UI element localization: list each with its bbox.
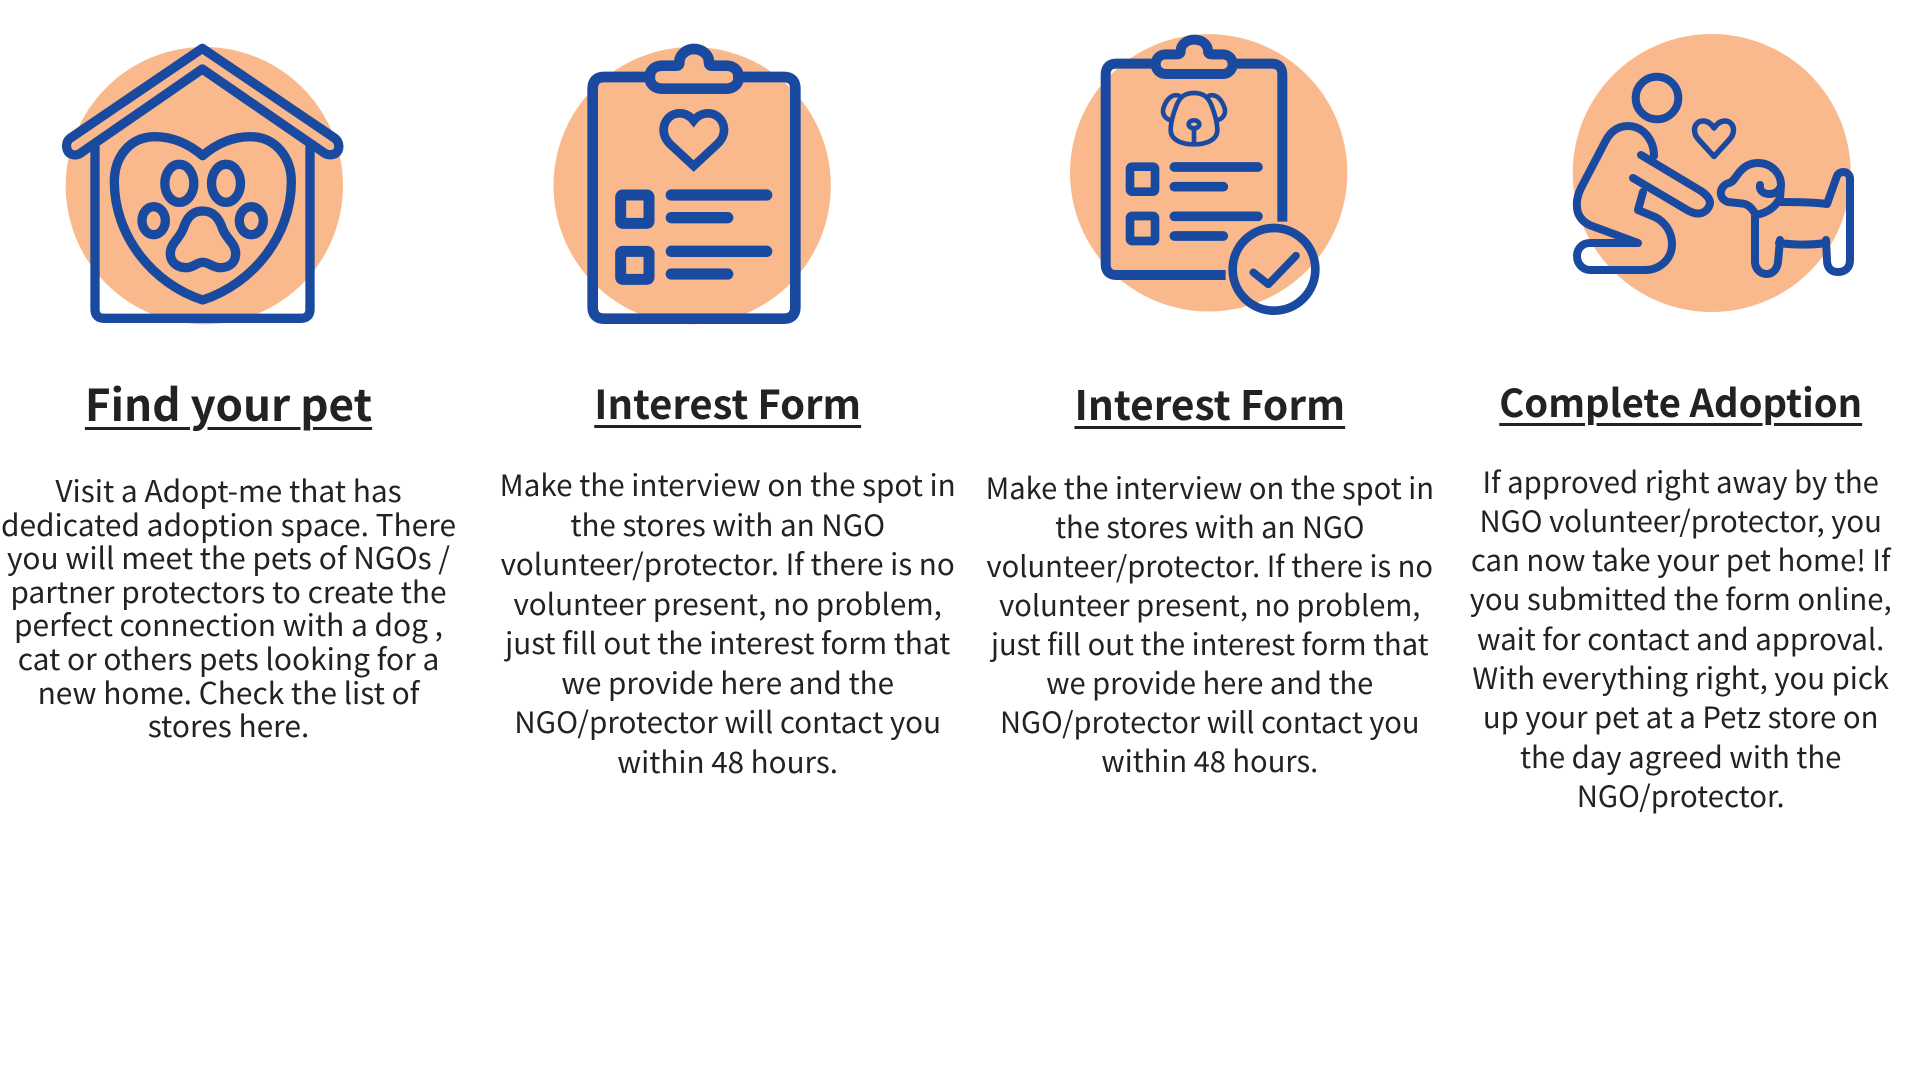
- text: complete adoption description: With everything right, you pick: [1472, 656, 1889, 698]
- text: interest form description: we provide here and the: [1046, 661, 1373, 703]
- panel: step 4 complete adoption: [1470, 34, 1892, 816]
- text: interest form description: just fill out the interest form that: [505, 620, 950, 663]
- text: interest form description: NGO/protector will contact you: [1000, 700, 1420, 742]
- icon: person greeting a dog: [1572, 34, 1854, 312]
- panel: step 2 interest form: [500, 44, 956, 782]
- text: find your pet description: new home. Check the list of: [38, 669, 419, 713]
- panel: step 3 interest form: [986, 34, 1434, 781]
- icon: clipboard with heart: [554, 44, 831, 324]
- panel: step 1 find your pet: [1, 44, 456, 746]
- text: interest form description: within 48 hours.: [1101, 739, 1318, 781]
- text: complete adoption description: wait for contact and approval.: [1477, 617, 1884, 659]
- text: complete adoption description: If approved right away by the: [1482, 460, 1879, 502]
- text: interest form description: [986, 466, 1434, 781]
- text: complete adoption description: [1470, 460, 1892, 816]
- text: find your pet description: partner protectors to create the: [10, 568, 447, 612]
- text: find your pet description: [1, 467, 456, 746]
- text: find your pet description: cat or others pets looking for a: [18, 635, 439, 679]
- text: complete adoption description: NGO volunteer/protector, you: [1479, 499, 1882, 541]
- text: interest form description: Make the interview on the spot in: [500, 462, 956, 505]
- text: interest form description: volunteer/protector. If there is no: [501, 541, 955, 584]
- text: interest form description: the stores with an NGO: [570, 502, 885, 545]
- text: interest form description: the stores with an NGO: [1055, 505, 1364, 547]
- text: complete adoption description: NGO/protector.: [1577, 774, 1785, 816]
- text: find your pet description: perfect connection with a dog ,: [14, 601, 443, 645]
- text: interest form description: just fill out the interest form that: [991, 622, 1429, 664]
- heading: interest form: Interest Form: [1074, 373, 1345, 432]
- text: interest form description: volunteer present, no problem,: [513, 581, 942, 624]
- text: interest form description: NGO/protector will contact you: [514, 699, 941, 742]
- text: complete adoption description: can now take your pet home! If: [1471, 538, 1891, 580]
- text: complete adoption description: you submitted the form online,: [1470, 577, 1892, 619]
- text: interest form description: Make the interview on the spot in: [986, 466, 1434, 508]
- heading: complete adoption: Complete Adoption: [1499, 374, 1862, 429]
- icon: clipboard with dog and check mark: [1070, 34, 1348, 315]
- heading: find your pet: Find your pet: [85, 370, 372, 434]
- text: find your pet description: Visit a Adopt-me that has: [55, 467, 402, 511]
- text: complete adoption description: up your pet at a Petz store on: [1483, 695, 1878, 737]
- text: interest form description: we provide here and the: [561, 660, 894, 703]
- heading: interest form: Interest Form: [594, 372, 861, 430]
- text: interest form description: [500, 462, 956, 782]
- text: interest form description: volunteer present, no problem,: [999, 583, 1420, 625]
- text: find your pet description: you will meet the pets of NGOs /: [7, 534, 450, 578]
- text: complete adoption description: the day agreed with the: [1520, 735, 1841, 777]
- text: find your pet description: dedicated adoption space. There: [1, 501, 456, 545]
- text: interest form description: within 48 hours.: [617, 739, 838, 782]
- text: interest form description: volunteer/protector. If there is no: [987, 544, 1433, 586]
- icon: dog house with paw heart: [62, 44, 344, 324]
- text: find your pet description: stores here.: [148, 702, 309, 746]
